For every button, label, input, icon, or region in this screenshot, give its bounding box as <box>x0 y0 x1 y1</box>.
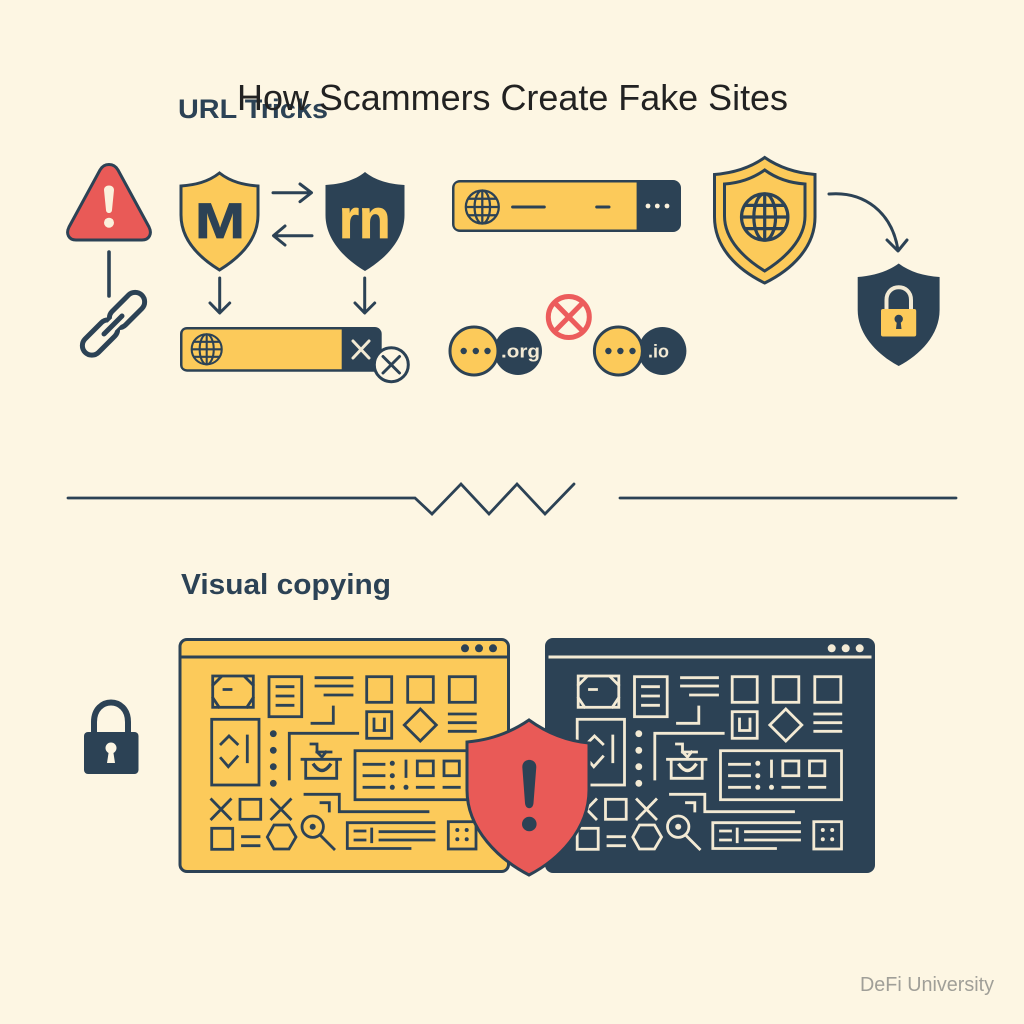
section heading: URL Tricks: URL Tricks <box>178 94 328 124</box>
connector line <box>107 252 111 296</box>
icon: fake shield rn: rn <box>339 188 391 250</box>
domain badge: .io: .io <box>648 342 669 362</box>
icon: warning triangle <box>68 164 150 240</box>
icon: fake shield rn <box>326 172 404 271</box>
url bar with dashes <box>452 180 681 232</box>
url bar with rejected address <box>180 327 408 382</box>
icon: real shield M: M <box>195 193 245 249</box>
title: How Scammers Create Fake Sites <box>237 77 788 118</box>
panel: real site window <box>180 640 508 872</box>
section heading: Visual copying: Visual copying <box>181 569 391 601</box>
icon: globe shield <box>714 158 815 283</box>
panel: fake site window <box>545 638 875 873</box>
icon: red cross circle <box>548 296 589 338</box>
watermark: DeFi University <box>860 974 994 996</box>
arrow: down right <box>355 278 375 313</box>
icon: red warning shield <box>467 720 589 875</box>
domain badge: .org <box>450 327 542 375</box>
arrow: down left <box>210 278 230 313</box>
domain badge: .org: .org <box>501 342 540 362</box>
arrow: curved to lock shield <box>829 194 907 251</box>
icon: lock shield <box>858 264 940 366</box>
arrow: left <box>274 226 312 245</box>
arrow: right <box>273 184 312 202</box>
domain badge: .io <box>594 327 686 375</box>
icon: chain link <box>78 288 149 359</box>
icon: padlock <box>84 702 138 774</box>
divider <box>68 484 956 514</box>
icon: real shield M <box>181 173 258 270</box>
